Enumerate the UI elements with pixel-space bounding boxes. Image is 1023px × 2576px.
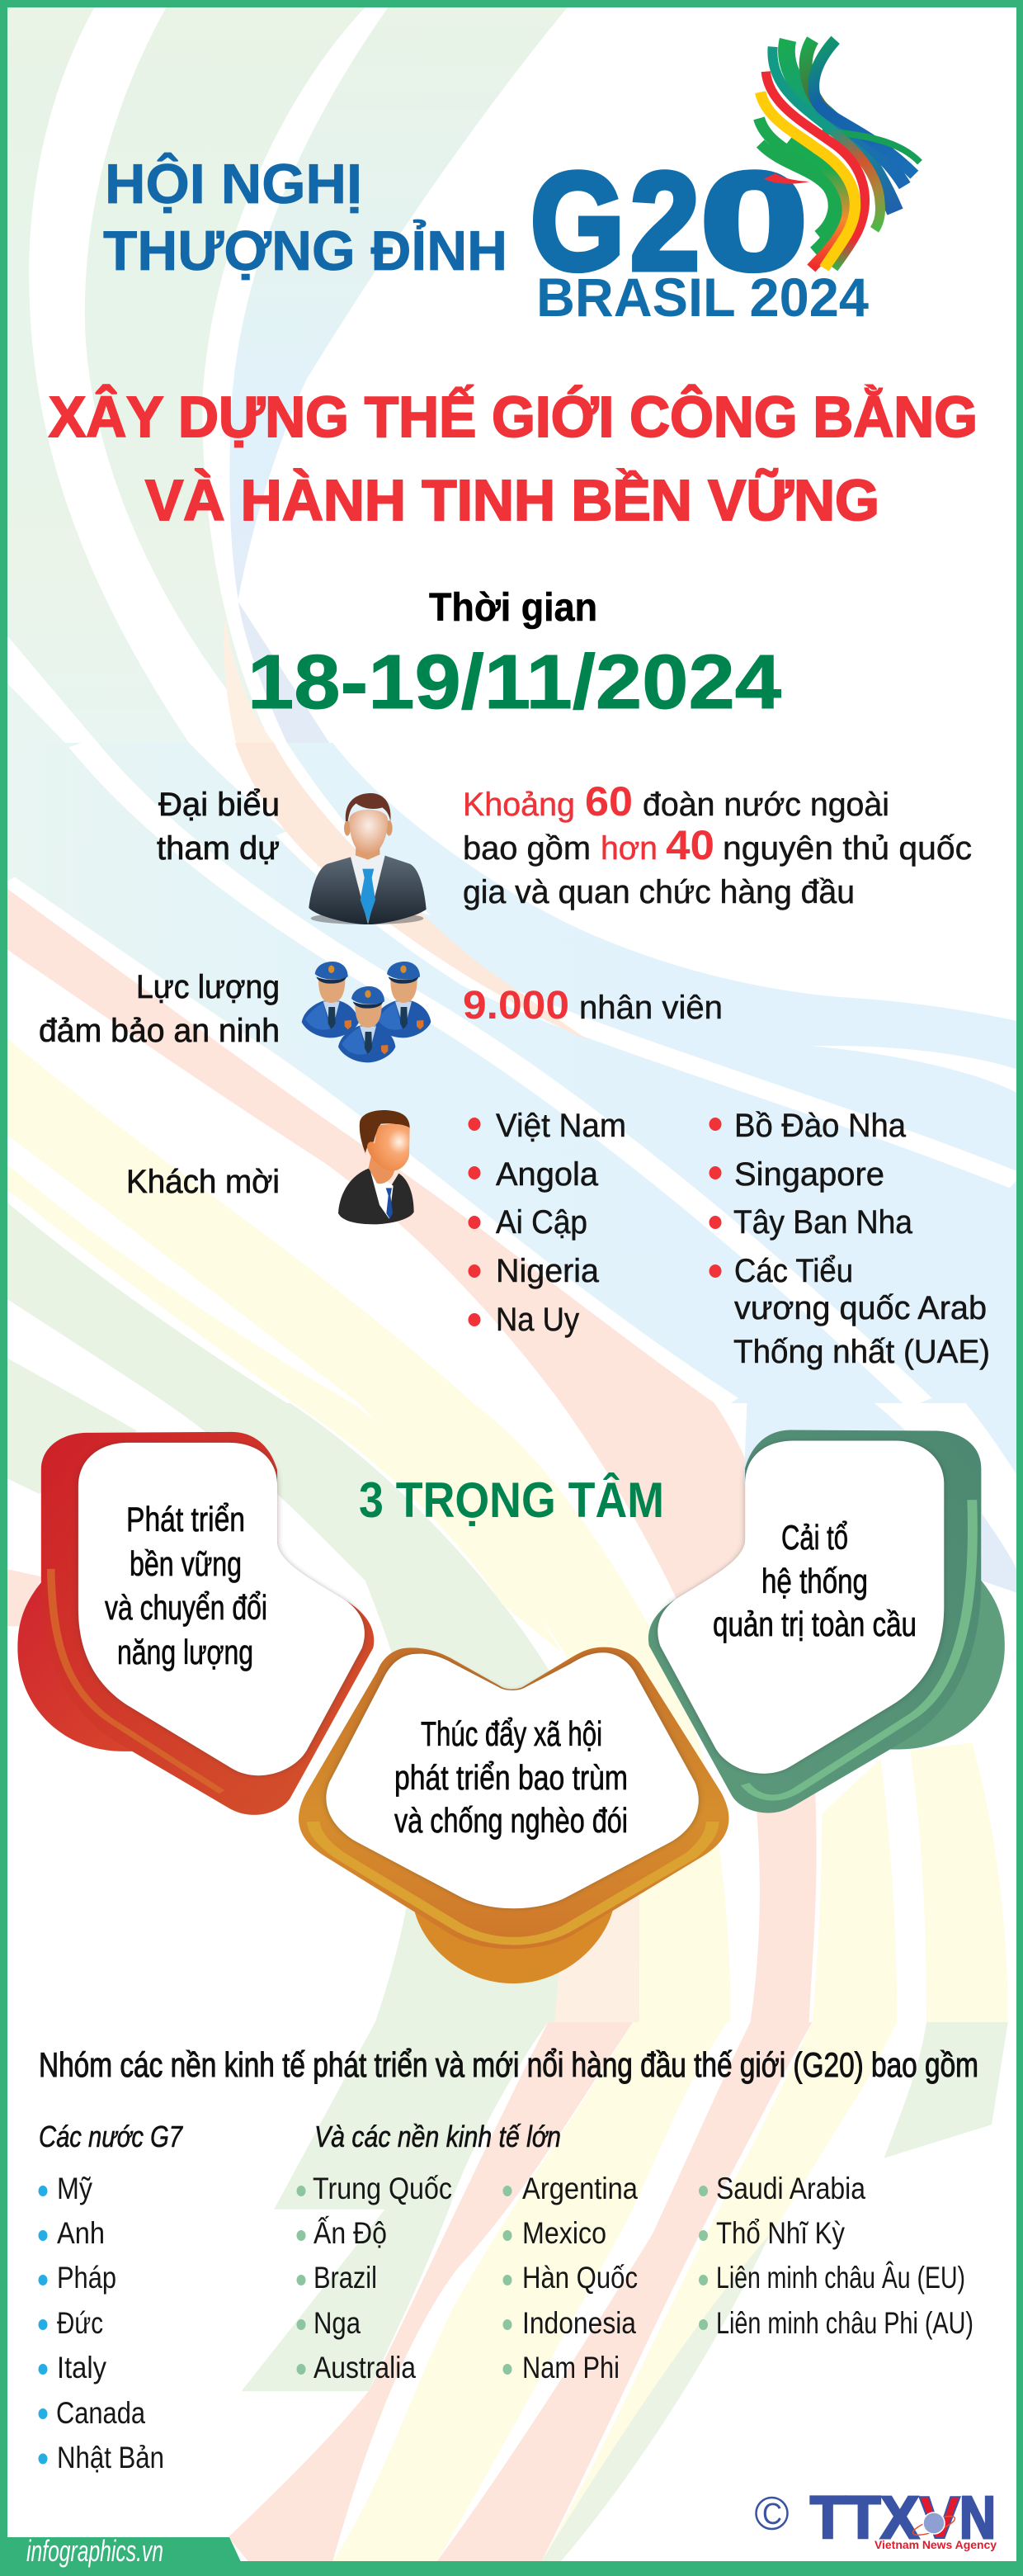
row label: Đại biểu tham dự: Đại biểu [158,787,280,823]
logo: TTXVN Vietnam News Agency: Vietnam News Agency [874,2538,997,2551]
row label: Lực lượng đảm bảo an ninh: đảm bảo an ninh [39,1013,280,1049]
list: major economies column 2: Nam Phi [522,2351,620,2385]
logo: TTXVN Vietnam News Agency: TTX [810,2485,919,2551]
list: G7 members: Italy [57,2351,106,2385]
card: red focus, sustainable development [17,1432,374,1815]
date: 18-19/11/2024: 18-19/11/2024 [248,639,781,725]
icon: three security officers [302,962,431,1062]
list: major economies column 3 [699,2172,974,2340]
text block: security staff count: nhân viên [579,990,723,1026]
label: Thời gian: Thời gian [429,586,597,630]
text block: security staff count: 9.000 [463,984,569,1028]
card: orange focus, social inclusion: Thúc đẩy xã hội [421,1714,602,1753]
logo: G20 Brasil 2024: BRASIL 2024 [536,267,869,328]
list: major economies column 2: Argentina [522,2172,638,2205]
list: major economies column 1 [297,2172,452,2385]
text block: delegates count: đoàn nước ngoài [643,787,889,823]
list: guest countries column 2: Bồ Đào Nha [734,1108,907,1144]
list: major economies column 1: Nga [314,2306,361,2340]
list: guest countries column 1: Nigeria [496,1253,600,1289]
list: major economies column 1: Ấn Độ [314,2216,387,2250]
list: guest countries column 2: Tây Ban Nha [733,1204,913,1241]
background ribbons: focus area [7,1403,1016,2022]
subheading: G7: Các nước G7 [39,2120,184,2153]
row label: Đại biểu tham dự: tham dự [157,830,280,867]
text block: delegates count: 60 [585,778,633,825]
list: guest countries column 1: Việt Nam [496,1108,626,1144]
logo: G20 Brasil 2024: 2 [630,144,700,299]
card: red focus, sustainable development: và chuyển đổi [105,1588,267,1627]
card: green focus, governance [648,1430,1005,1813]
list: G7 members: Anh [57,2216,105,2250]
list: major economies column 2 [503,2172,638,2385]
heading: Hội nghị thượng đỉnh [103,152,507,282]
logo: G20 Brasil 2024: G [530,144,625,299]
logo: TTXVN Vietnam News Agency [810,2485,997,2551]
text block: delegates count [463,778,972,910]
heading: Hội nghị thượng đỉnh: THƯỢNG ĐỈNH [103,219,507,282]
list: major economies column 2: Hàn Quốc [522,2261,638,2295]
text block: delegates count: hơn [601,830,658,867]
list: G7 members: Nhật Bản [57,2441,164,2474]
text block: delegates count: nguyên thủ quốc [723,830,972,867]
list: G7 members: Pháp [57,2261,116,2295]
list: major economies column 3: Saudi Arabia [716,2172,865,2205]
list: guest countries column 1: Ai Cập [496,1204,587,1241]
list: G7 members: Mỹ [57,2172,92,2205]
card: green focus, governance: quản trị toàn cầu [713,1605,917,1643]
title: Xây dựng thế giới công bằng và hành tinh bền vững [49,384,978,532]
card: orange focus, social inclusion: phát triển bao trùm [394,1758,628,1797]
heading: Hội nghị thượng đỉnh: HỘI NGHỊ [105,152,362,215]
card: orange focus, social inclusion [299,1647,728,1983]
list: guest countries column 2: Các Tiểu [734,1253,853,1289]
icon: delegate in dark suit [309,793,427,924]
list: G7 members: Đức [57,2306,103,2340]
row label: Đại biểu tham dự [157,787,280,867]
text block: delegates count: 40 [666,822,714,868]
list: guest countries column 2: Thống nhất (UAE) [733,1334,990,1370]
footer: infographics.vn: infographics.vn [26,2534,163,2568]
list: major economies column 1: Brazil [314,2261,377,2295]
subheading: other economies: Và các nền kinh tế lớn [314,2120,561,2153]
background ribbons: lower flow [229,2022,1008,2561]
logo: TTXVN Vietnam News Agency: V [919,2485,960,2551]
list: guest countries column 1: Na Uy [496,1302,579,1338]
text block: delegates count: gia và quan chức hàng đầu [463,874,855,910]
list: major economies column 3: Thổ Nhĩ Kỳ [716,2216,845,2250]
logo: G20 Brasil 2024 [530,40,920,328]
list: G7 members [38,2172,164,2474]
list: major economies column 2: Indonesia [522,2306,636,2340]
row label: Khách mời: Khách mời [126,1164,280,1200]
icon: copyright mark [756,2497,787,2531]
title: Xây dựng thế giới công bằng và hành tinh bền vững: XÂY DỰNG THẾ GIỚI CÔNG BẰNG [49,384,978,449]
background ribbons: middle flow [7,743,1016,1403]
title: Xây dựng thế giới công bằng và hành tinh bền vững: VÀ HÀNH TINH BỀN VỮNG [145,468,879,532]
card: green focus, governance: Cải tổ [781,1518,848,1557]
card: green focus, governance: hệ thống [761,1562,868,1600]
list: major economies column 2: Mexico [522,2216,606,2250]
list: G7 members: Canada [56,2396,145,2430]
heading: 3 trọng tâm: 3 TRỌNG TÂM [359,1472,664,1528]
text block: security staff count [463,984,723,1028]
text block: delegates count: Khoảng [463,787,575,823]
icon: copyright mark: C [762,2497,782,2531]
list: major economies column 1: Australia [314,2351,416,2385]
logo: G20 Brasil 2024: 0 [700,144,808,299]
text block: delegates count: bao gồm [463,830,591,867]
card: red focus, sustainable development: năng lượng [117,1633,253,1671]
logo: TTXVN Vietnam News Agency: N [959,2485,996,2551]
row label: Lực lượng đảm bảo an ninh: Lực lượng [136,969,280,1005]
list: guest countries column 1 [469,1108,626,1338]
icon: guest in black suit [338,1110,414,1224]
background ribbons: upper arch [7,7,568,743]
card: orange focus, social inclusion: và chống nghèo đói [394,1801,628,1840]
card: red focus, sustainable development: bền vững [130,1544,242,1583]
list: guest countries column 1: Angola [496,1156,599,1193]
list: guest countries column 2 [710,1108,990,1370]
list: guest countries column 2: vương quốc Arab [734,1290,987,1326]
row label: Lực lượng đảm bảo an ninh [39,969,280,1049]
card: red focus, sustainable development: Phát triển [126,1500,245,1539]
list: guest countries column 2: Singapore [734,1156,884,1193]
list: major economies column 1: Trung Quốc [313,2172,452,2205]
